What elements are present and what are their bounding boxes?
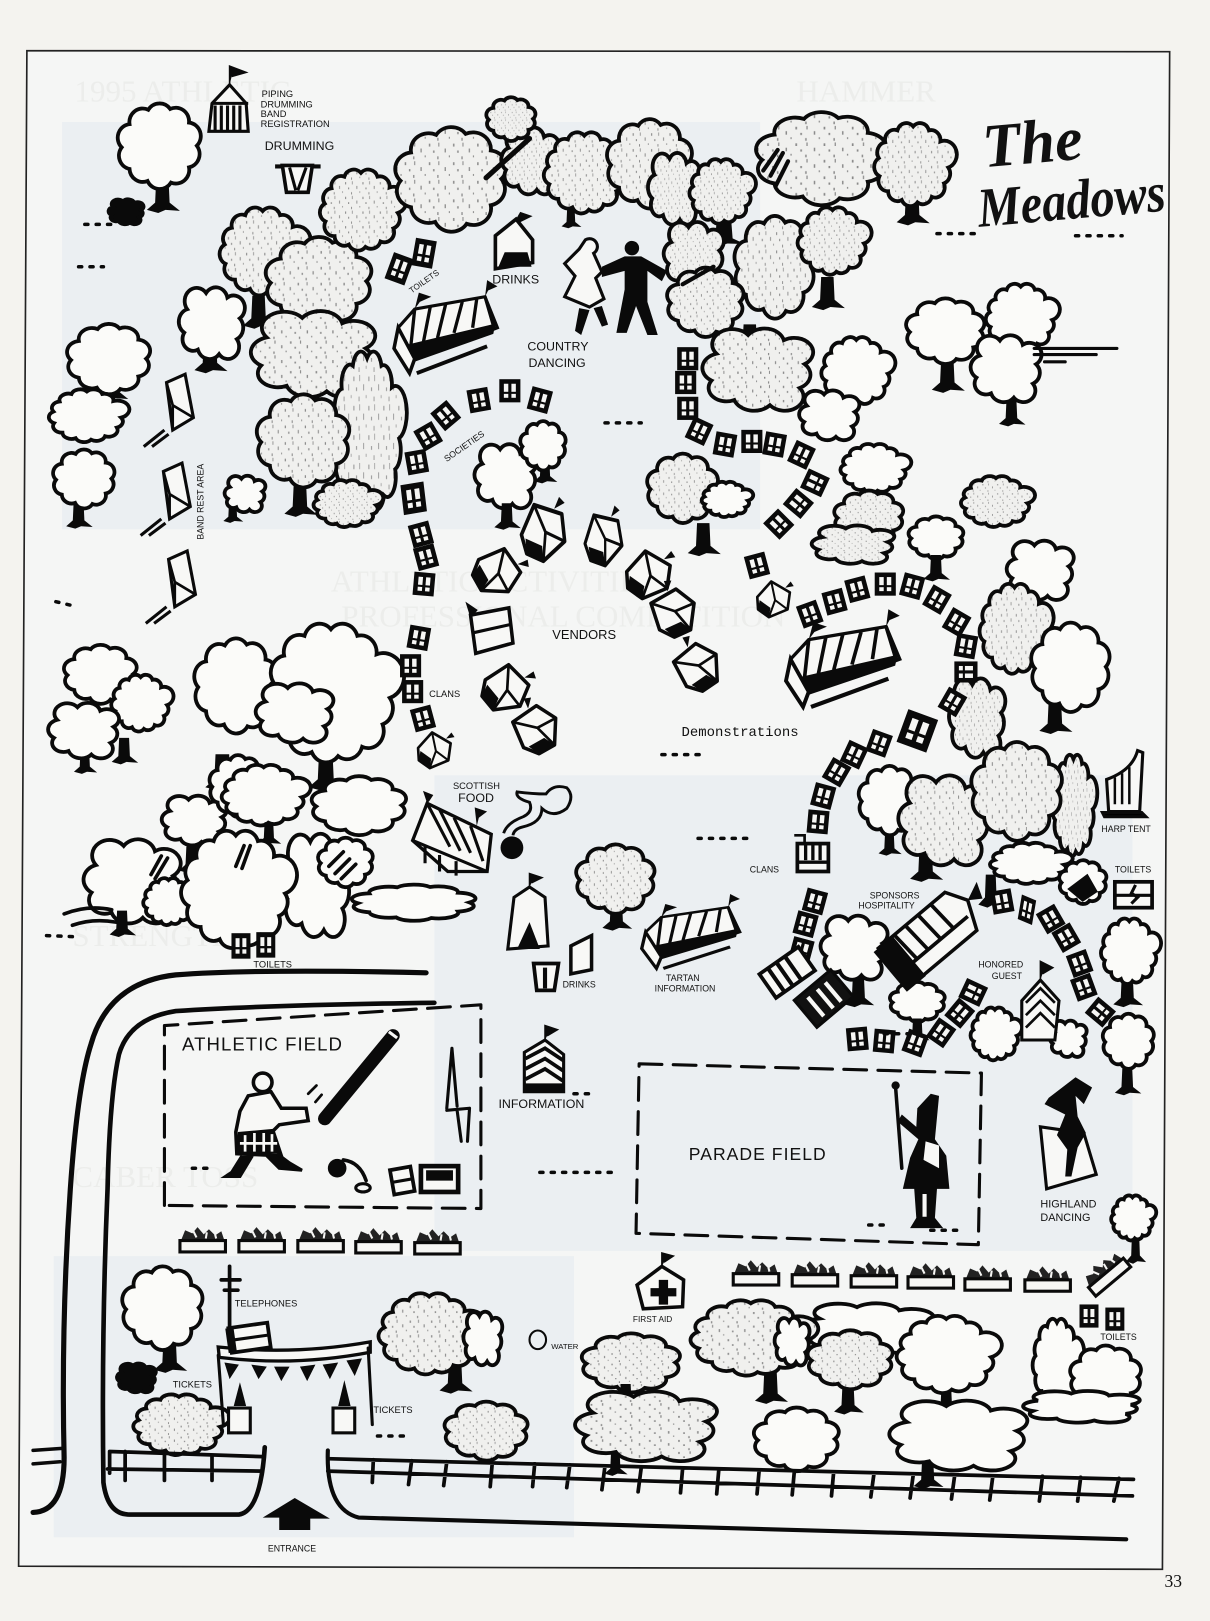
map labels: HOSPITALITY [858, 901, 915, 911]
map labels: TOILETS [253, 960, 292, 970]
toilets: north [388, 241, 434, 282]
drum [275, 165, 321, 192]
map labels: HIGHLAND [1040, 1198, 1097, 1210]
flower beds: east [733, 1248, 1131, 1296]
athlete [225, 1073, 308, 1176]
entrance arrow [263, 1498, 330, 1530]
dots and motion marks [47, 224, 1122, 1436]
tent: sponsors hospitality [874, 872, 1002, 992]
map labels: FIRST AID [633, 1315, 672, 1324]
ticket booth left [229, 1382, 250, 1433]
trees: centre right cluster [474, 421, 1161, 1095]
first aid [637, 1253, 684, 1309]
drinks tent north [495, 212, 533, 269]
map labels: DANCING [1040, 1212, 1090, 1224]
vendor tents [465, 496, 729, 759]
information tent [524, 1026, 564, 1093]
tent: honored guest [1022, 961, 1059, 1040]
map labels: TICKETS [173, 1379, 212, 1389]
map labels: WATER [551, 1342, 579, 1351]
map labels: INFORMATION [498, 1097, 584, 1111]
map labels: SCOTTISH [453, 781, 500, 791]
map labels: SPONSORS [870, 890, 920, 900]
small striped tents [759, 947, 853, 1027]
harp [1102, 751, 1146, 817]
map labels: ENTRANCE [268, 1544, 316, 1554]
parade field boundary [636, 1064, 981, 1245]
show-through ghost text: 1995 ATHLETIC [74, 73, 291, 108]
show-through ghost text: CABER TOSS [72, 1159, 258, 1194]
hammer [328, 1159, 370, 1192]
map labels: ATHLETIC FIELD [182, 1033, 343, 1054]
booth: clans [794, 835, 828, 871]
tent: scottish food [413, 791, 491, 876]
toilets: east [1115, 882, 1152, 908]
map labels: CLANS [750, 865, 779, 875]
ticket booth right [333, 1380, 355, 1433]
map labels: COUNTRY [527, 339, 588, 353]
map labels: DRUMMING [265, 139, 334, 153]
map labels: HONORED [978, 960, 1023, 970]
map labels: BAND [261, 109, 287, 119]
trees: lower left forest [48, 624, 476, 948]
piping tent [209, 66, 248, 131]
map labels: TOILETS [408, 268, 441, 295]
map labels: DANCING [528, 356, 586, 370]
map labels: TELEPHONES [235, 1299, 297, 1309]
map labels: PIPING [262, 89, 293, 99]
map labels: TARTAN [666, 973, 700, 983]
field booths [390, 1166, 458, 1195]
show-through ghost text [72, 73, 936, 1194]
show-through ghost text: HAMMER [796, 73, 936, 108]
booths: societies [403, 381, 550, 594]
map labels: GUEST [992, 971, 1023, 981]
trees: upper left grove [49, 103, 407, 529]
pole vault frame [447, 1048, 470, 1141]
tent: tartan information [642, 894, 740, 968]
map labels: DRINKS [492, 272, 539, 286]
show-through ghost text: STRENGTH [72, 918, 234, 953]
map labels [173, 89, 1151, 1554]
map labels: BAND REST AREA [196, 464, 206, 540]
caber [308, 1032, 397, 1119]
map labels: TOILETS [1100, 1332, 1137, 1342]
map labels: REGISTRATION [261, 119, 330, 129]
drinks stand [534, 936, 592, 990]
page number: 33 [1164, 1571, 1182, 1591]
map labels: INFORMATION [655, 983, 715, 993]
telephone pole [221, 1266, 240, 1327]
road stub [33, 1448, 62, 1464]
toilets: south [1082, 1307, 1122, 1328]
map labels: PARADE FIELD [689, 1144, 827, 1164]
handwritten title [969, 98, 1168, 240]
show-through ghost text: PROFESSIONAL COMPETITION [341, 598, 785, 633]
trees: bottom rows [117, 844, 1156, 1489]
handwritten title: Meadows [974, 162, 1168, 240]
south road [328, 1450, 1126, 1539]
band rest tents [141, 374, 195, 623]
trees: top arc [320, 97, 1117, 440]
telephone booth [225, 1323, 271, 1353]
left fence [108, 1451, 263, 1480]
toilets: forest [234, 935, 273, 956]
map labels: SOCIETIES [442, 429, 486, 464]
tent: demonstrations [786, 609, 900, 707]
show-through ghost text: ATHLETIC ACTIVITIES [331, 563, 656, 598]
booths: clans west [402, 627, 455, 768]
athletic field boundary [164, 1005, 481, 1209]
handwritten title: The [980, 105, 1085, 181]
map labels: DRUMMING [261, 100, 313, 110]
cooking pot and smoke [501, 787, 571, 859]
country dancers [565, 239, 667, 335]
map labels: Demonstrations [682, 725, 799, 741]
map labels: CLANS [429, 689, 460, 699]
water marker [530, 1331, 546, 1349]
inner road [103, 1003, 434, 1515]
outer road [33, 971, 426, 1512]
map labels: DRINKS [563, 979, 596, 989]
map labels: FOOD [458, 791, 494, 805]
map labels: TOILETS [1115, 865, 1151, 875]
entrance gate [218, 1342, 372, 1425]
map labels: TICKETS [373, 1405, 413, 1415]
tent: tall drinks [508, 874, 548, 949]
show-through panels [54, 122, 1132, 1537]
map labels: VENDORS [552, 627, 616, 642]
right fence [328, 1459, 1133, 1501]
flower beds: west [180, 1227, 460, 1254]
tent: country dancing [394, 280, 497, 373]
piper [891, 1081, 949, 1228]
map labels: HARP TENT [1101, 824, 1151, 834]
highland dancer [1040, 1077, 1096, 1189]
booths: eastern arc [677, 349, 1113, 1055]
